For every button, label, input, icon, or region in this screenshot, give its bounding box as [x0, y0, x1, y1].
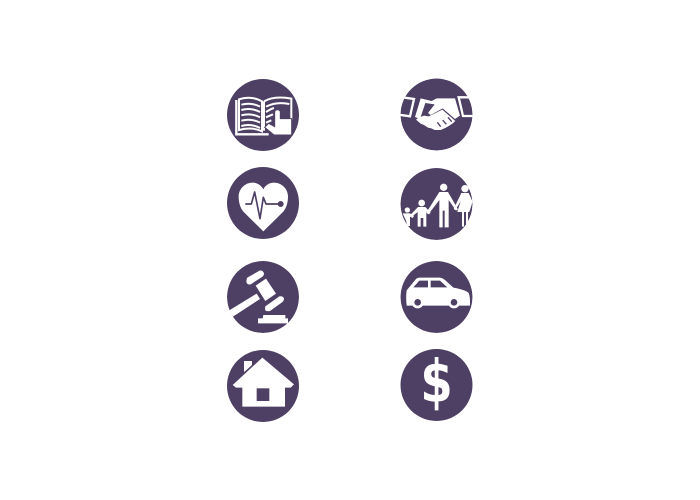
icon: house	[227, 350, 299, 422]
icon: open book with pointing hand	[227, 79, 299, 151]
icon: judge gavel	[227, 261, 299, 333]
icon: dollar sign: $	[420, 349, 453, 416]
icon: dollar sign	[400, 349, 472, 421]
icon: family holding hands	[400, 168, 473, 240]
icon: car	[400, 261, 472, 333]
icon: heart with heartbeat	[227, 167, 299, 239]
icon: handshake	[399, 78, 473, 150]
